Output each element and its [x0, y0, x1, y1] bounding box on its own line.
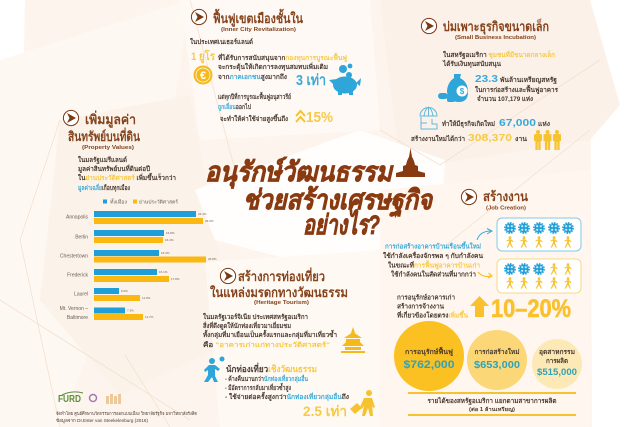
text: historic districts: ในย่านประวัติศาสตร์ เพิ่มขึ้นเร็วกว่า [78, 172, 176, 182]
text: machinery: ใช้กำลังเครื่องจักรพล ๆ กับกำลังคน [383, 250, 484, 260]
text: new construction: การก่อสร้างอาคารบ้านเรือนขึ้นใหม่ [385, 240, 481, 250]
main title: ช่วยสร้างเศรษฐกิจ [243, 185, 434, 218]
main title: อย่างไร? [303, 209, 380, 240]
stat: 1 euro: 1 ยูโร [191, 49, 215, 64]
source credit: จัดทำโดย ศูนย์ศึกษานวัตกรรมการออกแบบเมือง วิทยาลัยรัฐกิจ มหาวิทยาลัยรังสิต [56, 410, 197, 417]
text: direct: ที่เกี่ยวข้องโดยตรงเพิ่มขึ้น [397, 310, 469, 320]
icon: umbrella box [420, 107, 437, 129]
source credit [56, 410, 197, 424]
arrow: blue [477, 228, 492, 240]
panel: property values [60, 110, 217, 321]
bar chart: 16.4% [165, 238, 174, 242]
text: from private sector: จากภาคเอกชนสูงมากถึง [218, 73, 287, 82]
text: netherlands: ในประเทศเนเธอร์แลนด์ [190, 37, 253, 46]
icon: traveller with suitcase [350, 390, 375, 416]
caption: income by sector: (ต่อ 1 ล้านเหรียญ) [469, 406, 515, 413]
caption: income by sector [408, 392, 576, 416]
text: return rate: - มีอัตราการกลับมาเที่ยวซ้ำสูง [225, 382, 291, 393]
icon: euro coin [194, 66, 212, 84]
text: new jobs: สร้างงานใหม่ได้กว่า [411, 134, 465, 143]
bar chart: Baltimore [67, 315, 88, 321]
circle: manufacturing: $515,000 [537, 367, 577, 377]
legend: ทั้งเมือง [110, 196, 128, 206]
icon: tourists [204, 356, 224, 382]
icon: money bag: $ [460, 87, 465, 96]
circle: conservation [394, 321, 464, 391]
text: construction: ในการก่อสร้างและฟื้นฟูอาคาร [475, 84, 558, 95]
icon: euro coin: € [200, 70, 206, 82]
stat: 3 times: 3 เท่า [296, 72, 326, 89]
bar chart: 26.8% [208, 257, 217, 261]
bar chart: 26.0% [205, 219, 214, 223]
bar chart: 24.4% [198, 212, 207, 216]
heading: property values [63, 110, 140, 151]
circle: manufacturing: อุตสาหกรรม [539, 349, 575, 356]
logos: FURD [58, 394, 81, 405]
heading: heritage tourism: (Heritage Tourism) [254, 300, 309, 306]
heading: job creation: สร้างงาน [483, 189, 528, 204]
text: land value: มูลค่าสินทรัพย์บนที่ดินต่อปี [78, 163, 150, 174]
bar chart: 15.1% [159, 270, 168, 274]
icon box: new construction [497, 218, 581, 251]
heading: heritage tourism [210, 267, 348, 306]
caption: income by sector: รายได้ของสหรัฐอเมริกา แยกตามสาขาการผลิต [428, 396, 556, 406]
heading: small business incubation [421, 17, 549, 41]
icon: pagoda [396, 148, 425, 177]
text: employment: สร้างการจ้างงาน [397, 302, 445, 310]
icon: temple [341, 327, 365, 353]
logos [58, 392, 121, 405]
panel: heritage tourism [203, 267, 375, 419]
icon: piggy bank [329, 64, 361, 95]
text: jobs: งาน [515, 136, 528, 143]
bar chart: Berlin [75, 234, 88, 240]
arrow: gold [478, 272, 492, 278]
icon: three workers [534, 130, 561, 150]
circle: manufacturing: การผลิต [546, 357, 568, 365]
circle: conservation: การอนุรักษ์ฟื้นฟู [405, 346, 453, 357]
bar chart: 6.0% [121, 289, 128, 293]
text: usa funding: ในสหรัฐอเมริกา ชุมชนที่มีขนาดกลางเล็ก [443, 49, 555, 60]
text: new businesses: ทำให้มีธุรกิจเกิดใหม่ [442, 119, 495, 128]
legend: ย่านประวัติศาสตร์ [139, 198, 178, 206]
stat: 23.3 billion: 23.3 [475, 74, 499, 85]
heading: heritage tourism: ในแหล่งมรดกทางวัฒนธรรม [210, 284, 348, 300]
circle: manufacturing [532, 339, 582, 389]
heading: property values: (Property Values) [82, 145, 134, 151]
bar chart: Mt. Vernon – [60, 306, 88, 312]
bar chart: 11.7% [145, 315, 154, 319]
text: restoration: ในขณะที่การฟื้นฟูอาคารบ้านเก่า [388, 260, 480, 270]
text: postponed: ถูกเลื่อนออกไป [218, 101, 251, 112]
text: average: มูลค่าเฉลี่ยเกือบทุกเมือง [78, 182, 130, 193]
bar chart: 11.0% [142, 296, 151, 300]
bar chart: Annapolis [66, 214, 88, 220]
source credit: ข้อมูลจาก Dr.Ester van Steekelenburg (2016) [56, 418, 148, 424]
legend [103, 196, 178, 206]
text: private investment: จะกระตุ้นให้เกิดการลงทุนสมทบเพิ่มเติม [218, 61, 328, 71]
icon: money bag [438, 74, 468, 102]
text: visitor groups: ทั้งกลุ่มที่มาเยือนเป็นครั้งแรกและกลุ่มที่มาเที่ยวซ้ำ [203, 329, 337, 339]
bar chart: Chestertown [60, 254, 88, 260]
stat: 15 percent [296, 109, 333, 126]
text: stay longer: - ค้างคืนนานกว่านักท่องเที่ยวกลุ่มอื่น [225, 373, 308, 383]
panel: inner city revitalization [190, 8, 361, 126]
text: places: แห่ง [538, 120, 550, 128]
heading: heritage tourism: สร้างการท่องเที่ยว [238, 267, 325, 284]
text: billion usd: พันล้านเหรียญสหรัฐ [500, 75, 557, 85]
heading: job creation: (Job Creation) [486, 206, 526, 212]
text: more labour: ใช้กำลังคนในสัดส่วนที่มากกว่า [391, 268, 476, 278]
heading: small business incubation: บ่มเพาะธุรกิจขนาดเล็ก [443, 17, 549, 35]
heading: inner city revitalization [191, 8, 303, 33]
text: buildings count: จำนวน 107,179 แห่ง [477, 95, 533, 103]
circle: new construction: การก่อสร้างใหม่ [474, 347, 520, 356]
bar chart: 16.8% [166, 231, 175, 235]
bar chart: 15.3% [161, 251, 170, 255]
text: funding: ที่ได้รับการสนับสนุนจากกองทุนการบูรณะฟื้นฟู [218, 52, 347, 63]
text: cultural tourists: นักท่องเที่ยวเชิงวัฒนธรรม [226, 362, 317, 374]
heading: inner city revitalization: ฟื้นฟูเขตเมืองชั้นใน [213, 8, 303, 27]
bar chart: Frederick [67, 272, 88, 278]
text: virginia: ในมลรัฐเวอร์จิเนีย ประเทศสหรัฐอเมริกา [203, 312, 308, 322]
bar chart: 17.8% [171, 277, 180, 281]
bar chart: Laurel [74, 292, 88, 298]
stat: 308,370: 308,370 [468, 133, 513, 144]
heading: inner city revitalization: (Inner City Revitalization) [221, 27, 296, 33]
heading: job creation [461, 189, 528, 212]
panel: small business incubation [411, 17, 561, 150]
circle: new construction: $653,000 [474, 360, 520, 371]
text: conservation jobs: การอนุรักษ์อาคารเก่า [397, 294, 455, 302]
main title [205, 148, 434, 240]
arrow: up [470, 296, 489, 317]
stat: 15 percent: 15% [306, 109, 333, 126]
stat: 2.5 times: 2.5 เท่า [303, 403, 347, 419]
text: postponed restoration: แต่ทุกปีที่การบูรณะฟื้นฟูอนุสาวรีย์ [218, 91, 291, 102]
heading: property values: สินทรัพย์บนที่ดิน [68, 127, 140, 144]
stat: 67,000: 67,000 [499, 118, 537, 129]
bar chart [60, 211, 217, 321]
circle: conservation: $762,000 [404, 359, 454, 371]
text: attractions: สิ่งที่ดึงดูดให้นักท่องเที่ยวมาเยี่ยมชม [203, 320, 291, 331]
main title: อนุรักษ์วัฒนธรรม [205, 156, 394, 189]
text: received funding: ได้รับเงินทุนสนับสนุน [442, 59, 502, 68]
panel: job creation [383, 189, 582, 416]
circle: new construction [467, 330, 527, 390]
stat: 10-20 percent: 10–20% [491, 295, 571, 323]
heading: small business incubation: (Small Business Incubation) [455, 35, 536, 41]
bar chart: 7.3% [127, 308, 134, 312]
text: historic buildings: คือ "อาคารเก่าแก่ทางประวัติศาสตร์" [203, 341, 330, 349]
text: maryland: ในมลรัฐแมรีแลนด์ [78, 155, 127, 165]
icon box: restoration [497, 259, 581, 293]
text: spend more: - ใช้จ่ายต่อครั้งสูงกว่านักท่องเที่ยวกลุ่มอื่นถึง [225, 391, 349, 402]
text: higher costs: จะทำให้ค่าใช้จ่ายสูงขึ้นถึง [220, 113, 288, 124]
heading: property values: เพิ่มมูลค่า [85, 110, 136, 128]
